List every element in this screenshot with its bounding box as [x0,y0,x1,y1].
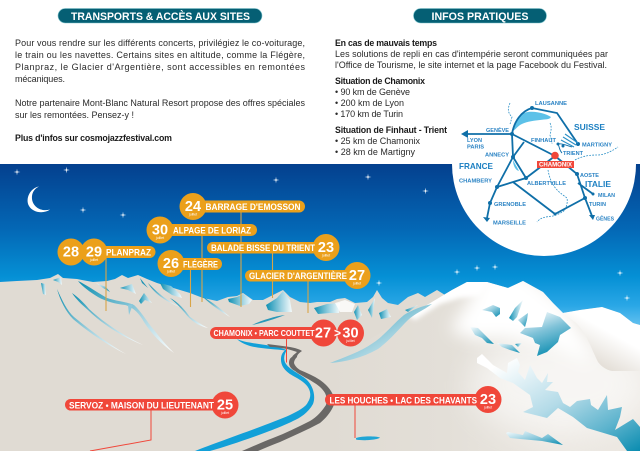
map circle: ANNECY [485,152,509,158]
label: barrage d'emosson: 24 [185,199,201,215]
night sky [0,164,640,334]
label: glacier d'argentière: GLACIER D'ARGENTIÈRE [249,270,347,281]
label: flégère: FLÉGÈRE [183,258,218,269]
text block: infos pratiques: • 200 km de Lyon [335,98,404,108]
map circle: GÊNES [596,214,614,222]
icon: crescent moon [28,186,50,212]
text block: infos pratiques: Situation de Finhaut - Trient [335,125,447,135]
text block: transports [15,38,306,143]
text block: transports: Pour vous rendre sur les différents concerts, privilégiez le co-voiturage, [15,38,305,48]
mountains: glaciers [470,300,640,451]
text block: infos pratiques: • 90 km de Genève [335,87,410,97]
red poles [90,339,355,451]
map circle: AOSTE [580,173,599,179]
stars [14,167,630,301]
label: servoz maison du lieutenant [65,392,238,418]
label: glacier d'argentière [245,262,370,289]
label: servoz maison du lieutenant: 25 [217,398,233,414]
label: chamonix parc couttet: > [334,326,341,340]
label: servoz maison du lieutenant: juillet [220,411,229,415]
map circle [452,72,636,256]
label: planpraz: PLANPRAZ [106,247,151,257]
label: flégère: 26 [163,256,179,272]
label: glacier d'argentière: 27 [349,268,365,284]
label: glacier d'argentière: juillet [352,282,361,286]
header: infos pratiques: INFOS PRATIQUES [432,11,528,23]
borders [508,103,618,222]
label: chamonix parc couttet: 30 [342,326,359,342]
text block: infos pratiques: • 170 km de Turin [335,109,403,119]
label: les houches lac des chavants: LES HOUCHES • LAC DES CHAVANTS [330,395,477,405]
lake [513,112,551,131]
label: barrage d'emosson: juillet [188,212,197,216]
chamonix marker [551,152,559,159]
text block: transports: sur les remontées. Pensez-y ! [15,110,134,120]
massif ice streak [330,304,432,363]
map circle: GRENOBLE [494,202,526,208]
map circle: MARSEILLE [493,220,526,226]
label: balade bisse du trient: juillet [321,254,330,258]
city labels: LAUSANNE [535,101,567,107]
label: les houches lac des chavants [325,386,502,413]
label: les houches lac des chavants: 23 [480,392,496,408]
label: alpage de loriaz: juillet [155,236,164,240]
road [242,344,334,451]
label: chamonix parc couttet: CHAMONIX • PARC COUTTET [214,328,315,338]
map circle: TRIENT [563,151,583,157]
text block: infos pratiques: • 28 km de Martigny [335,147,416,157]
label: planpraz [58,238,156,266]
label: chamonix parc couttet: 27 [315,326,331,342]
label: servoz maison du lieutenant: SERVOZ • MAISON DU LIEUTENANT [69,400,214,410]
label: alpage de loriaz: ALPAGE DE LORIAZ [173,225,251,235]
text block: transports: Planpraz, le Glacier d'Argentière, sont accessibles en remontées [15,62,306,72]
map circle: CHAMBERY [459,178,492,184]
header: infos pratiques [414,8,546,23]
trient glacier [561,134,578,147]
map circle: TURIN [589,202,606,208]
icon: lac des chavants [356,436,380,440]
map circle: MARTIGNY [582,142,612,148]
label: barrage d'emosson: BARRAGE D'EMOSSON [206,202,301,212]
label: chamonix parc couttet: juillet [345,339,355,343]
label: planpraz: 29 [86,244,102,260]
mountains: snow massif [409,281,640,451]
map circle: PARIS [467,144,484,150]
map circle: FINHAUT [531,138,556,144]
header: transports: TRANSPORTS & ACCÈS AUX SITES [71,10,250,23]
roads [465,108,593,218]
text block: infos pratiques [335,38,608,157]
label: planpraz: juillet [89,258,98,262]
label: barrage d'emosson [180,193,305,220]
nodes [488,106,594,216]
right peak [563,307,640,371]
text block: infos pratiques: Situation de Chamonix [335,76,425,86]
label: flégère: juillet [166,270,175,274]
map circle: MILAN [598,193,615,199]
map circle: ITALIE [585,179,611,189]
poles [106,212,308,313]
map circle: LYON [467,138,482,144]
map circle: SUISSE [574,122,605,132]
label: alpage de loriaz: 30 [152,222,168,238]
label: balade bisse du trient: 23 [318,240,334,256]
text block: infos pratiques: l'Office de Tourisme, le site internet et la page Facebook du Festival. [335,60,607,70]
mountains: back range ice [41,277,418,354]
map circle: FRANCE [459,161,493,171]
map circle: GENÈVE [486,126,509,134]
text block: transports: Notre partenaire Mont-Blanc Natural Resort propose des offres spéciales [15,98,306,108]
text block: infos pratiques: En cas de mauvais temps [335,38,437,48]
map circle: CHAMONIX [539,162,573,169]
text block: infos pratiques: Les solutions de repli en cas d'intempérie seront communiquées par [335,49,608,59]
label: balade bisse du trient [207,234,340,261]
text block: transports: mécaniques. [15,74,65,84]
text block: infos pratiques: • 25 km de Chamonix [335,136,420,146]
label: chamonix parc couttet [210,320,364,346]
map circle: ALBERTVILLE [527,181,566,187]
label: les houches lac des chavants: juillet [483,406,492,410]
text block: transports: le train ou les navettes. Certains sites en altitude, comme la Flégère, [15,50,305,60]
label: alpage de loriaz [146,216,257,244]
label: balade bisse du trient: BALADE BISSE DU TRIENT [211,243,315,253]
label: flégère [158,250,222,277]
mountains: back range [0,274,480,451]
river [195,339,314,451]
text block: transports: Plus d'infos sur cosmojazzfestival.com [15,133,172,143]
label: planpraz: 28 [63,244,79,260]
